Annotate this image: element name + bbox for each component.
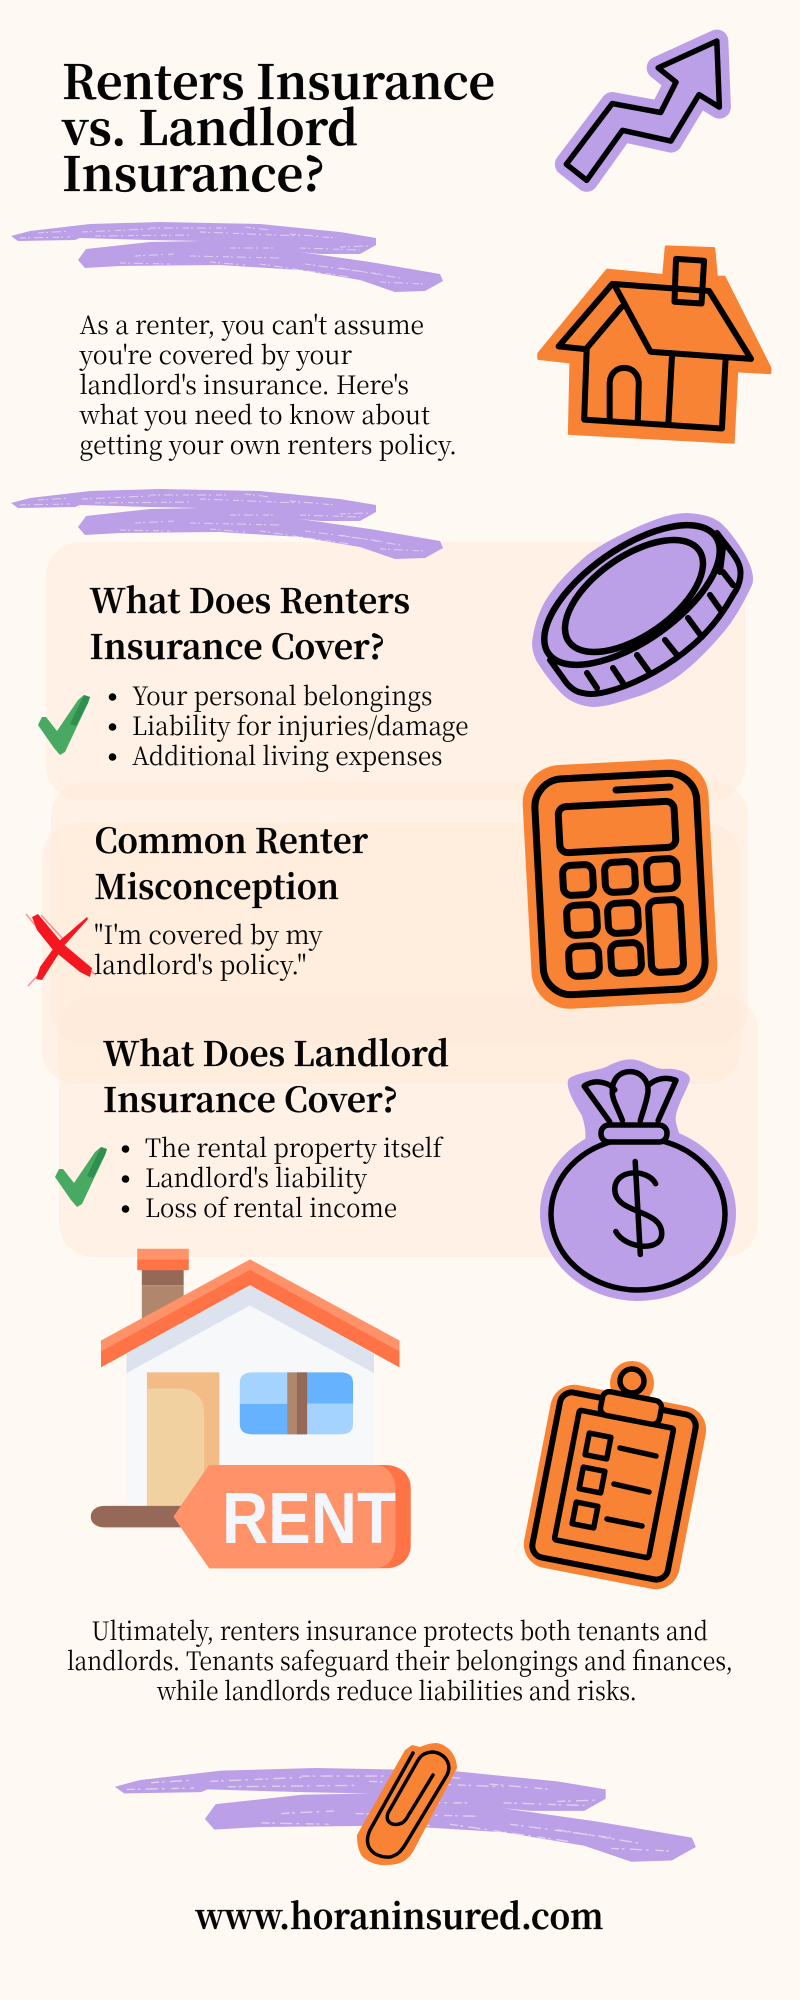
rent tag bbox=[173, 1465, 411, 1568]
conclusion text bbox=[67, 1612, 733, 1708]
intro text: what you need to know about bbox=[79, 396, 431, 432]
icon: green check bbox=[55, 1147, 107, 1207]
brush stroke: upper bbox=[11, 222, 443, 292]
brush stroke: bottom bbox=[115, 1768, 696, 1862]
intro text: landlord's insurance. Here's bbox=[80, 366, 409, 402]
intro text: As a renter, you can't assume bbox=[80, 306, 424, 342]
intro text: you're covered by your bbox=[79, 336, 352, 372]
illustration: rent house bbox=[91, 1249, 411, 1568]
panel background: misconception rear bbox=[51, 782, 748, 1044]
intro text bbox=[79, 306, 457, 462]
heading bbox=[103, 1027, 449, 1122]
icon: money bag bbox=[540, 1059, 736, 1301]
heading: Insurance Cover? bbox=[90, 620, 385, 669]
quote: "I'm covered by my bbox=[94, 916, 323, 952]
icon: rising arrow bbox=[566, 41, 719, 180]
door bbox=[147, 1372, 219, 1507]
icon: clipboard bbox=[520, 1361, 710, 1593]
quote: landlord's policy." bbox=[94, 946, 306, 982]
panel background: what landlord insurance covers bbox=[59, 996, 758, 1257]
gable bbox=[127, 1285, 374, 1373]
icon: calculator bbox=[521, 757, 719, 1011]
heading: What Does Landlord bbox=[103, 1027, 449, 1076]
heading: What Does Renters bbox=[90, 574, 410, 623]
conclusion text: while landlords reduce liabilities and risks. bbox=[156, 1672, 637, 1708]
heading: Common Renter bbox=[94, 814, 368, 863]
roof bbox=[101, 1259, 399, 1367]
wall bbox=[127, 1291, 374, 1509]
heading: Insurance Cover? bbox=[103, 1073, 398, 1122]
text block: what does landlord insurance cover bbox=[103, 1027, 449, 1225]
title: Insurance? bbox=[62, 138, 325, 205]
website: www.horaninsured.com bbox=[195, 1890, 604, 1940]
bullet list: Your personal belongings bbox=[132, 677, 432, 713]
conclusion text: Ultimately, renters insurance protects both tenants and bbox=[92, 1612, 708, 1648]
heading bbox=[90, 574, 410, 669]
bullet list: Additional living expenses bbox=[132, 737, 442, 773]
panel background: what renters insurance covers bbox=[46, 542, 745, 800]
intro text: getting your own renters policy. bbox=[80, 426, 457, 462]
text block: common renter misconception bbox=[94, 814, 368, 982]
text block: what does renters insurance cover bbox=[90, 574, 468, 773]
icon: coin bbox=[522, 498, 753, 707]
quote bbox=[94, 916, 323, 982]
bullet list: The rental property itself bbox=[145, 1129, 444, 1165]
rent label: RENT bbox=[222, 1479, 396, 1559]
icon: green check bbox=[38, 695, 90, 755]
panel background: misconception front bbox=[42, 823, 740, 1084]
chimney bbox=[137, 1249, 189, 1323]
heading bbox=[94, 814, 368, 909]
bullet list bbox=[109, 677, 468, 773]
title: vs. Landlord bbox=[61, 92, 358, 159]
icon: orange house bbox=[538, 246, 770, 443]
brush stroke: middle bbox=[11, 489, 443, 559]
bullet list bbox=[122, 1129, 444, 1225]
icon: red cross bbox=[26, 914, 96, 986]
window bbox=[240, 1372, 353, 1434]
heading: Misconception bbox=[94, 860, 339, 909]
step bbox=[91, 1506, 208, 1527]
icon: paperclip bbox=[357, 1743, 457, 1865]
title: Renters Insurance bbox=[62, 46, 495, 113]
conclusion text: landlords. Tenants safeguard their belongings and finances, bbox=[67, 1642, 733, 1678]
bullet list: Loss of rental income bbox=[145, 1189, 397, 1225]
title bbox=[61, 46, 495, 205]
bullet list: Liability for injuries/damage bbox=[132, 707, 468, 743]
bullet list: Landlord's liability bbox=[145, 1159, 368, 1195]
